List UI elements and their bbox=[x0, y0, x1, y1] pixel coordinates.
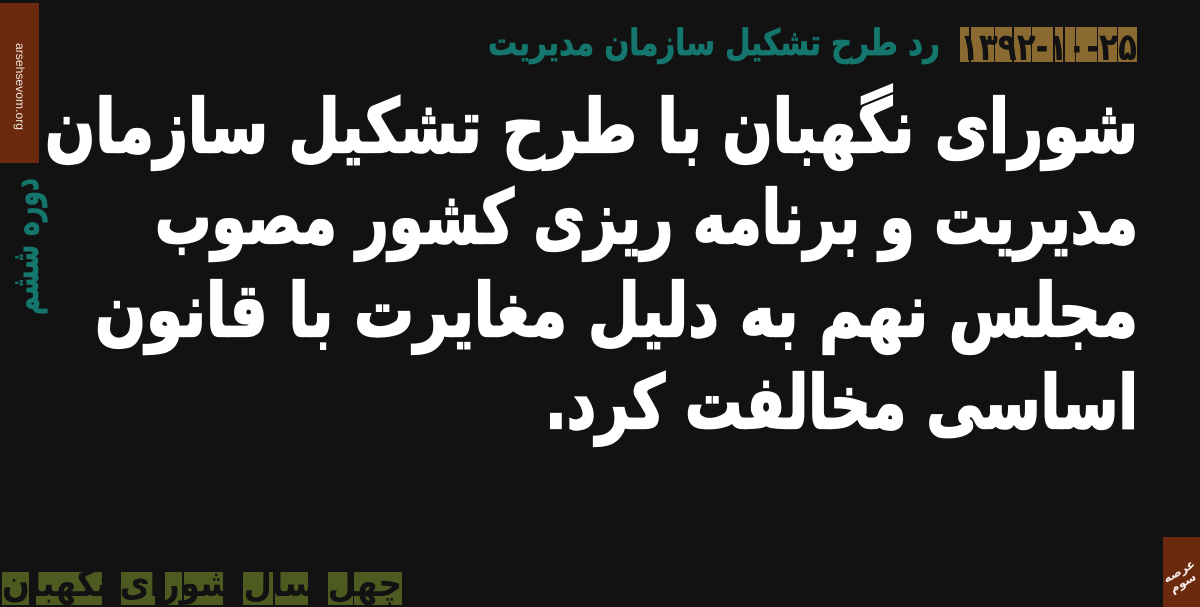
subheading: رد طرح تشکیل سازمان مدیریت bbox=[488, 23, 940, 64]
main headline bbox=[45, 84, 1138, 446]
date stamp: ۱۳۹۲-۱۰-۲۵ bbox=[960, 25, 1137, 69]
side tab: website address: arsehsevom.org bbox=[13, 43, 27, 130]
bottom stamp: series title: چهل سال شورای نگهبان bbox=[2, 561, 402, 605]
logo tab: سوم bbox=[1167, 569, 1199, 597]
vertical label: term number: دوره ششم bbox=[3, 178, 48, 315]
logo tab bbox=[1161, 537, 1200, 607]
logo tab: عرصه bbox=[1161, 556, 1198, 586]
side tab: website address bbox=[0, 3, 39, 163]
